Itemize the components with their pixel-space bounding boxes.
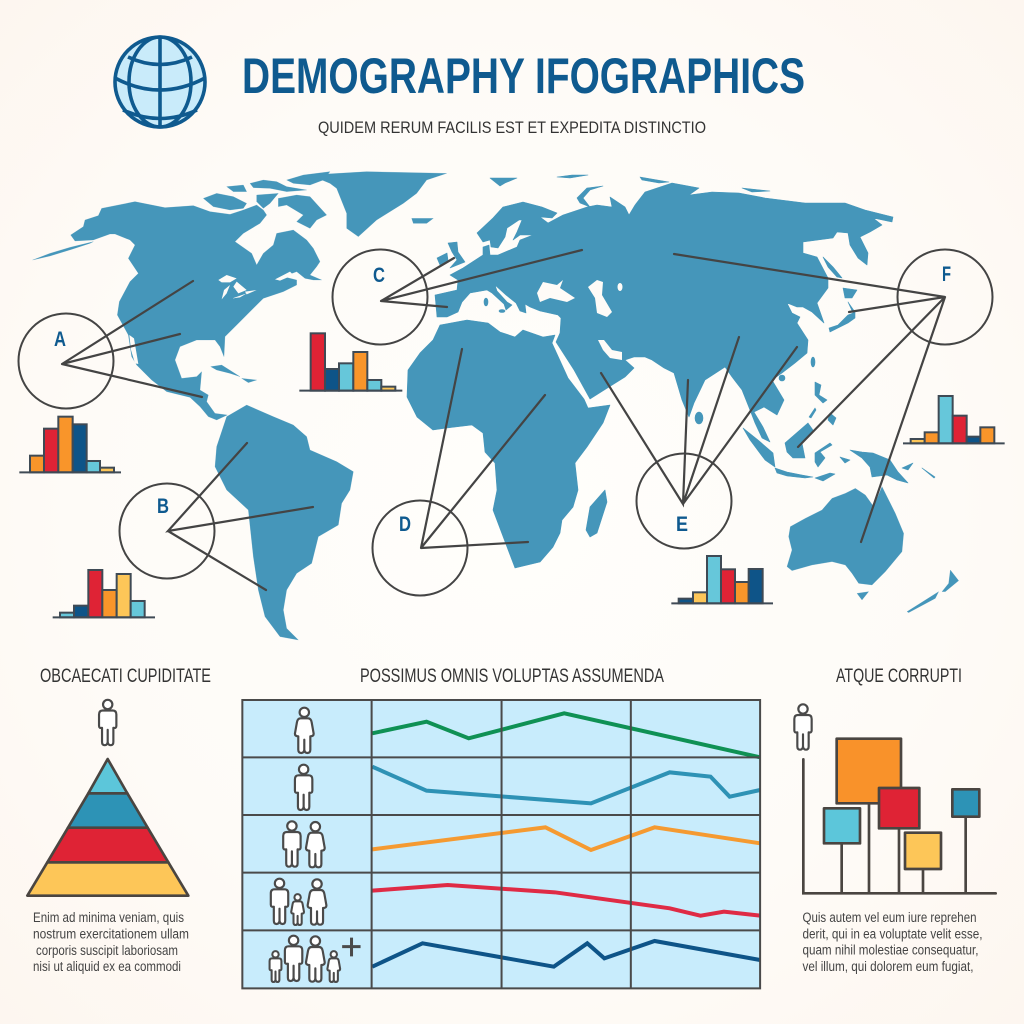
icon: family row 4	[271, 879, 326, 925]
icon: couple row 3	[283, 821, 325, 867]
table grid and lines	[242, 700, 760, 988]
bar chart B	[53, 570, 155, 617]
Africa	[407, 320, 610, 568]
icon: globe	[115, 37, 205, 127]
icon: person	[99, 700, 116, 745]
panel: pyramid	[27, 666, 211, 974]
line: teal	[372, 767, 760, 803]
heading: pyramid: OBCAECATI CUPIDITATE	[40, 666, 211, 687]
icon: large family row 5	[270, 936, 361, 982]
icon: woman row 1	[295, 708, 314, 753]
bar chart A	[19, 417, 121, 472]
callout A: A	[54, 328, 66, 351]
line: green	[372, 713, 760, 757]
text block: pyramid: nostrum exercitationem ullam	[33, 926, 189, 942]
icon: person	[794, 704, 812, 750]
callout C	[332, 250, 582, 344]
Eurasia	[435, 183, 893, 442]
text block: pyramid: Enim ad minima veniam, quis	[33, 910, 184, 925]
panel: squares chart	[794, 666, 996, 974]
bar chart E	[671, 556, 773, 603]
text block: squares chart: Quis autem vel eum iure reprehen	[802, 910, 976, 925]
text block: squares chart: derit, qui in ea voluptate velit esse,	[802, 926, 982, 942]
Great Lakes and gulf cut-outs	[129, 272, 293, 364]
heading: line table: POSSIMUS OMNIS VOLUPTAS ASSUMENDA	[360, 666, 664, 687]
line: navy	[372, 941, 760, 967]
callout D	[372, 349, 545, 596]
icon: man row 2	[295, 765, 312, 810]
text block: pyramid	[33, 910, 189, 974]
text block: squares chart: quam nihil molestiae consequatur,	[802, 942, 978, 958]
inland seas	[537, 280, 622, 360]
callout F: F	[942, 263, 951, 286]
subtitle: QUIDEM RERUM FACILIS EST ET EXPEDITA DISTINCTIO	[318, 118, 706, 137]
callout E	[601, 337, 797, 548]
heading: squares chart: ATQUE CORRUPTI	[836, 666, 962, 687]
pyramid chart	[27, 759, 188, 896]
North America	[33, 172, 330, 420]
callout E: E	[676, 513, 688, 536]
title: DEMOGRAPHY IFOGRAPHICS	[242, 48, 805, 104]
islands	[437, 175, 935, 537]
callout D: D	[399, 513, 411, 536]
bar chart F	[903, 396, 1005, 443]
text block: pyramid: nisi ut aliquid ex ea commodi	[33, 959, 181, 974]
line: orange	[372, 827, 760, 850]
line: red	[372, 885, 760, 916]
text block: pyramid: corporis suscipit laboriosam	[36, 943, 178, 958]
Australia and New Zealand	[787, 487, 959, 613]
callout B: B	[157, 495, 169, 518]
world map	[33, 172, 959, 640]
panel: line table	[242, 666, 760, 988]
header	[115, 37, 805, 137]
Greenland and Iceland	[310, 172, 447, 237]
bar chart C	[299, 333, 402, 391]
callout F	[674, 250, 992, 542]
callout C: C	[373, 264, 385, 287]
text block: squares chart	[802, 910, 982, 974]
squares chart	[803, 739, 996, 893]
callout A	[18, 281, 202, 408]
text block: squares chart: vel illum, qui dolorem eum fugiat,	[802, 959, 974, 974]
callout B	[120, 443, 313, 590]
South America	[215, 405, 353, 640]
